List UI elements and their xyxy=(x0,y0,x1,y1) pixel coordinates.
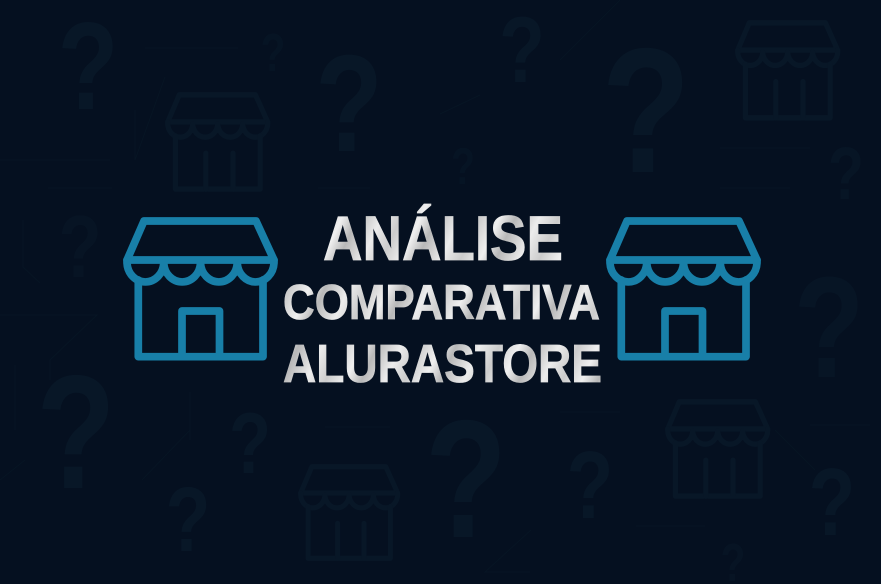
background store icon: bottom right xyxy=(668,402,768,496)
background question marks: ? xyxy=(36,342,116,523)
background question marks: ? xyxy=(59,197,101,296)
background question marks: ? xyxy=(425,386,507,573)
background store icon: bottom left xyxy=(301,467,398,558)
background question marks: ? xyxy=(794,247,864,408)
icon: left store xyxy=(127,221,274,357)
background store icon: top left xyxy=(168,95,268,189)
title xyxy=(283,204,602,394)
background question marks: ? xyxy=(229,396,271,492)
background question marks: ? xyxy=(567,432,613,539)
background question marks: ? xyxy=(451,136,475,195)
background store icon: top right xyxy=(738,23,838,118)
icon: right store xyxy=(610,221,757,357)
title: ANÁLISE xyxy=(323,204,563,274)
title: COMPARATIVA xyxy=(283,276,600,330)
background question marks: ? xyxy=(601,12,691,210)
background question marks: ? xyxy=(809,449,855,556)
title: ALURASTORE xyxy=(283,334,602,394)
background question marks: ? xyxy=(166,468,210,571)
background question marks: ? xyxy=(261,23,285,83)
background question marks: ? xyxy=(828,133,864,216)
background question marks: ? xyxy=(58,0,118,136)
background question marks: ? xyxy=(315,27,383,181)
background question marks: ? xyxy=(499,0,545,103)
